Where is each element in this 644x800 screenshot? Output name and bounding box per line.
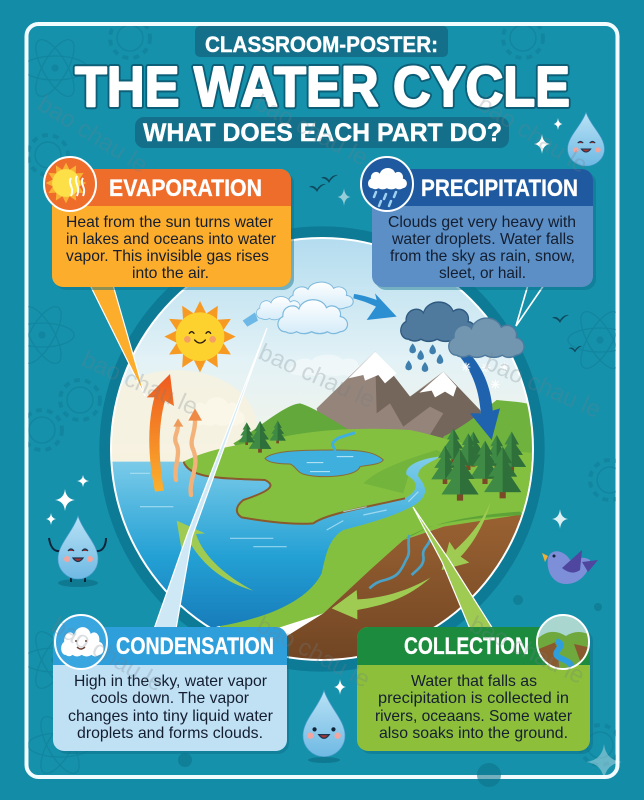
icon: bluebird — [542, 550, 598, 584]
green land — [183, 400, 537, 647]
icon: smiling cloud — [55, 615, 107, 669]
watermark: bao chau le — [465, 611, 589, 690]
trees — [239, 421, 526, 501]
title: THE WATER CYCLE — [75, 55, 570, 119]
character: droplet bottom — [303, 690, 345, 763]
birds — [309, 175, 582, 352]
sparkles — [46, 118, 622, 780]
arrow: evaporation main — [147, 374, 174, 492]
pointer: precipitation — [516, 285, 544, 326]
watermark: bao chau le — [481, 349, 605, 424]
watermark: bao chau le — [250, 89, 372, 172]
arrow: runoff to ocean — [177, 521, 253, 591]
arrow: infiltration — [442, 502, 491, 570]
lake — [265, 450, 383, 477]
body: collection — [375, 673, 573, 742]
heading: condensation: CONDENSATION — [116, 633, 274, 660]
clouds — [256, 282, 353, 334]
body: precipitation — [388, 214, 576, 282]
character: droplet with arms — [49, 516, 106, 587]
watermark — [33, 89, 605, 697]
underground streams — [369, 535, 431, 588]
watermark: bao chau le — [78, 346, 202, 421]
panel: collection — [357, 615, 593, 754]
sun — [164, 301, 236, 372]
rain clouds — [401, 302, 524, 389]
heading: evaporation: EVAPORATION — [109, 175, 262, 202]
heading: precipitation: PRECIPITATION — [421, 175, 578, 202]
heading: collection: COLLECTION — [404, 633, 529, 660]
body: evaporation: into the air. — [132, 265, 209, 282]
title: THE WATER CYCLE — [75, 55, 570, 119]
body: precipitation: sleet, or hail. — [439, 265, 526, 282]
body: precipitation: water droplets. Water falls — [391, 231, 574, 248]
pointer: evaporation — [90, 285, 145, 396]
character: droplet top right — [568, 112, 604, 166]
body: condensation: changes into tiny liquid water — [68, 708, 274, 725]
icon: rain cloud — [361, 157, 413, 211]
arrow: cloud to rain cloud — [243, 293, 397, 327]
body: evaporation: in lakes and oceans into water — [66, 231, 277, 248]
background dots — [178, 595, 602, 787]
circular water cycle scene — [97, 226, 545, 680]
sky — [110, 237, 537, 463]
body: collection: rivers, oceaans. Some water — [375, 708, 573, 725]
icon: sun with heat — [44, 157, 96, 211]
mountains — [317, 352, 487, 440]
icon: river landscape — [536, 615, 592, 672]
pointer: collection — [413, 507, 493, 629]
panel: precipitation — [361, 157, 596, 290]
panel: evaporation — [44, 157, 294, 290]
body: collection: Water that falls as — [411, 673, 537, 690]
arrow: falling rain — [458, 354, 500, 440]
body: evaporation: vapor. This invisible gas rises — [66, 248, 269, 265]
panel: condensation — [53, 615, 289, 754]
arrows: rising vapor — [173, 408, 202, 495]
heading badge: CLASSROOM-POSTER: — [205, 32, 438, 57]
watermark: bao chau le — [252, 611, 374, 694]
body: evaporation: Heat from the sun turns water — [66, 214, 274, 231]
body: collection: also soaks into the ground. — [379, 725, 568, 742]
soil — [287, 514, 522, 659]
subtitle badge: WHAT DOES EACH PART DO? — [143, 119, 502, 147]
body: precipitation: Clouds get very heavy with — [388, 214, 576, 231]
watermark: bao chau le — [473, 90, 592, 179]
body: condensation: High in the sky, water vapor — [74, 673, 268, 690]
body: evaporation — [66, 214, 277, 282]
body: condensation: droplets and forms clouds. — [77, 725, 263, 742]
body: collection: precipitation is collected in — [378, 690, 569, 707]
ocean and river — [112, 456, 439, 627]
body: condensation — [68, 673, 274, 742]
watermark: bao chau le — [47, 612, 168, 697]
body: precipitation: from the sky as rain, snow, — [390, 248, 575, 265]
pointer: condensation — [154, 328, 267, 629]
body: condensation: cools down. The vapor — [91, 690, 250, 707]
arrow: groundwater — [332, 577, 431, 619]
watermark: bao chau le — [255, 339, 379, 414]
watermark: bao chau le — [33, 90, 152, 179]
